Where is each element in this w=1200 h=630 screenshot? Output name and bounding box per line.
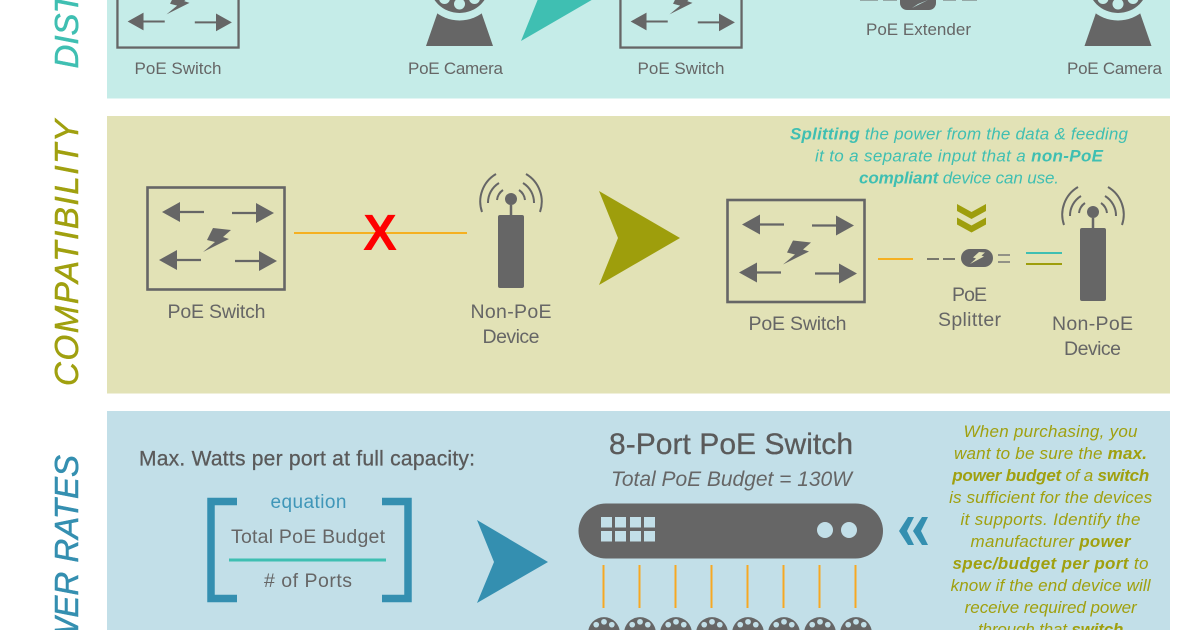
arrow: teal	[521, 0, 602, 41]
callout: purchasing note: want to be sure the max.	[954, 444, 1147, 463]
line: power input	[878, 258, 913, 260]
label: PoE Camera right: PoE Camera	[1067, 59, 1163, 78]
arrow: blue	[477, 520, 548, 603]
panel: compatibility	[48, 116, 1170, 394]
text: equation: equation	[270, 492, 346, 513]
callout: splitting note: it to a separate input that a non-PoE	[815, 146, 1103, 166]
icon: PoE camera left	[422, 0, 498, 46]
callout: purchasing note: power budget of a switch	[952, 466, 1149, 485]
icon: non-PoE device right	[1062, 187, 1124, 301]
icon: 8-port switch	[578, 504, 883, 558]
line: power output	[1026, 263, 1062, 265]
callout: purchasing note: receive required power	[965, 598, 1138, 617]
icon: double chevron down	[957, 204, 986, 232]
label: PoE Switch: PoE Switch	[168, 301, 266, 323]
callout: splitting note: Splitting the power from the data & feeding	[790, 124, 1128, 144]
icon: PoE switch left	[117, 0, 239, 48]
label: PoE Switch with splitter: PoE Switch	[748, 313, 846, 335]
title: 8-port PoE switch: 8-Port PoE Switch	[609, 428, 853, 461]
icon: PoE switch with splitter	[728, 200, 864, 302]
text: max watts heading: Max. Watts per port at full capacity:	[139, 448, 475, 470]
panel: power rates	[48, 411, 1170, 630]
callout: splitting note: compliant device can use.	[859, 168, 1059, 188]
label: PoE Switch right: PoE Switch	[638, 59, 724, 78]
icon: PoE switch right	[620, 0, 742, 48]
icon: PoE camera right	[1080, 0, 1156, 46]
text: number of ports: # of Ports	[264, 570, 352, 592]
fraction bar	[229, 558, 386, 562]
icon: PoE switch	[148, 188, 284, 290]
label: PoE Camera left: PoE Camera	[408, 59, 504, 78]
label: PoE Splitter: Splitter	[938, 309, 1002, 331]
label: Non-PoE Device right: Non-PoE	[1052, 313, 1133, 335]
equation	[211, 492, 408, 598]
icon: double chevron left	[899, 517, 928, 545]
heading: compatibility: COMPATIBILITY	[48, 118, 85, 386]
icon: non-PoE device	[480, 174, 542, 288]
callout: purchasing note: spec/budget per port to	[952, 554, 1148, 573]
callout: purchasing note: it supports. Identify the	[960, 510, 1140, 529]
label: Non-PoE Device: Non-PoE	[470, 301, 552, 323]
label: PoE Extender: PoE Extender	[866, 20, 971, 39]
label: Non-PoE Device right: Device	[1064, 338, 1121, 360]
port lines	[604, 565, 856, 608]
bracket: left	[211, 502, 237, 598]
callout: purchasing note: is sufficient for the devices	[949, 488, 1153, 507]
callout: purchasing note: When purchasing, you	[964, 422, 1138, 441]
callout: purchasing note: know if the end device will	[951, 576, 1152, 595]
icon: PoE extender	[860, 0, 977, 10]
icon: red X: X	[363, 204, 397, 261]
label: PoE Splitter: PoE	[952, 284, 987, 306]
icon: PoE splitter	[927, 249, 1010, 267]
label: Non-PoE Device: Device	[482, 326, 540, 348]
arrow: olive	[599, 191, 680, 285]
panel: distance	[48, 0, 1170, 98]
icons: port cameras	[584, 613, 876, 630]
callout: purchasing note: manufacturer power	[970, 532, 1130, 551]
subtitle: total budget: Total PoE Budget = 130W	[611, 468, 854, 491]
line: data output	[1026, 252, 1062, 254]
line: power connection	[294, 232, 467, 234]
bracket: right	[382, 502, 408, 598]
label: PoE Switch left: PoE Switch	[134, 59, 222, 78]
text: total PoE budget: Total PoE Budget	[231, 526, 386, 548]
